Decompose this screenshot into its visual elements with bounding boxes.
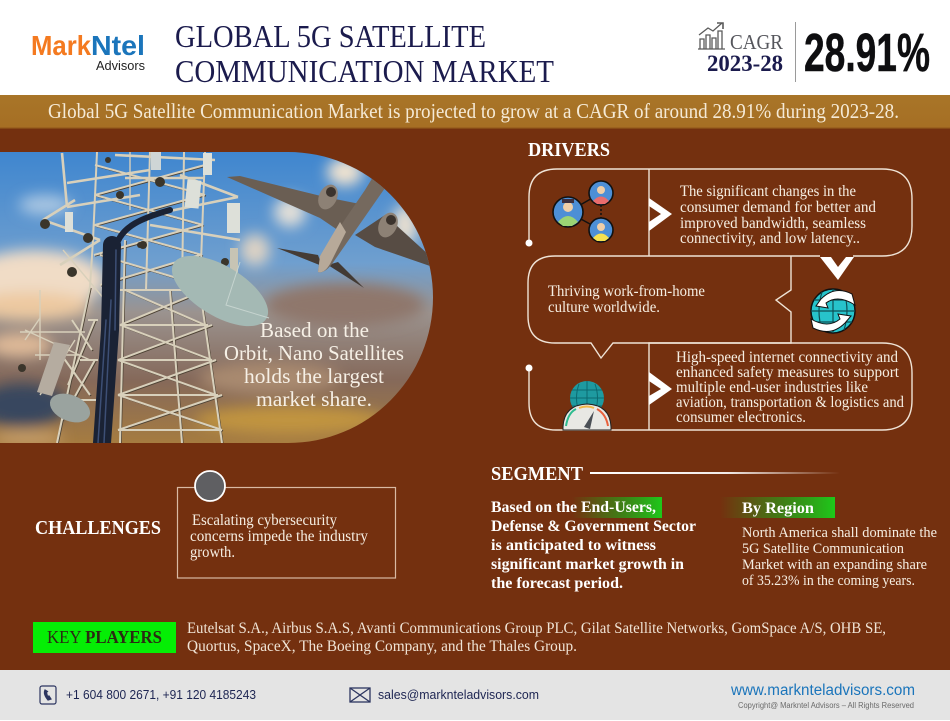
end-users highlight: [572, 497, 662, 518]
key players list: Eutelsat S.A., Airbus S.A.S, Avanti Communications Group PLC, Gilat Satellite Networks, GomSpace A/S, OHB SE,: [187, 620, 886, 637]
title: [175, 18, 554, 89]
driver 3 text: multiple end-user industries like: [676, 379, 868, 396]
driver 1 text: The significant changes in the: [680, 183, 856, 200]
by region text: [742, 525, 937, 589]
driver 3 text: [676, 349, 904, 426]
antenna panels: [37, 152, 240, 396]
copyright: Copyright@ Markntel Advisors – All Rights Reserved: [738, 701, 914, 710]
logo: [31, 30, 145, 73]
driver 3 text: High-speed internet connectivity and: [676, 349, 898, 366]
challenge box: [178, 488, 396, 578]
by region text: Market with an expanding share: [742, 557, 927, 573]
driver 2 text: culture worldwide.: [548, 299, 660, 316]
driver 3 text: enhanced safety measures to support: [676, 364, 900, 381]
driver 3 text: aviation, transportation & logistics and: [676, 394, 904, 411]
icon: people network: [553, 181, 613, 242]
heading: challenges: CHALLENGES: [35, 517, 161, 539]
driver 3 text: consumer electronics.: [676, 409, 806, 426]
by region heading: By Region: [742, 500, 814, 517]
driver 1 text: connectivity, and low latency..: [680, 230, 860, 247]
title: GLOBAL 5G SATELLITE: [175, 18, 486, 54]
CAGR label: [707, 30, 783, 76]
end-users text: significant market growth in: [491, 556, 684, 573]
key players list: Quortus, SpaceX, The Boeing Company, and the Thales Group.: [187, 638, 577, 655]
marker dots: [526, 240, 532, 372]
driver 2 text: Thriving work-from-home: [548, 283, 705, 300]
driver 1 text: consumer demand for better and: [680, 199, 876, 216]
panel: drivers flow: [526, 169, 912, 430]
by region text: North America shall dominate the: [742, 525, 937, 541]
icon: growth bar chart: [698, 23, 725, 49]
segment rule: [590, 472, 840, 474]
logo: Advisors: [96, 58, 145, 73]
photo caption: Based on the: [260, 318, 369, 342]
photo caption: holds the largest: [244, 364, 384, 388]
photo caption: Orbit, Nano Satellites: [224, 341, 404, 365]
icon: phone: [40, 686, 56, 704]
challenge text: concerns impede the industry: [190, 528, 368, 545]
photo panel: telecom tower and airplane: [0, 152, 440, 446]
CAGR label: CAGR: [730, 30, 783, 54]
airplane: [227, 176, 430, 288]
heading: segment: SEGMENT: [491, 463, 584, 485]
end-users text: Based on the End-Users,: [491, 499, 656, 516]
driver 2 text: [548, 283, 705, 316]
by region text: of 35.23% in the coming years.: [742, 573, 915, 589]
icon: globe with arrows: [811, 289, 855, 333]
header band: [0, 0, 950, 95]
challenge text: Escalating cybersecurity: [192, 512, 337, 529]
panel: key players: [33, 620, 886, 655]
challenge text: growth.: [190, 544, 235, 561]
panel: segment: [491, 463, 937, 592]
icon: envelope: [350, 688, 370, 702]
chevrons: [649, 198, 854, 405]
flow outlines: [528, 169, 912, 430]
satellite dish small: [50, 394, 90, 422]
heading: drivers: DRIVERS: [528, 139, 610, 161]
key players badge: KEY PLAYERS: [47, 627, 162, 647]
end-users text: [491, 499, 696, 592]
clouds: [0, 158, 425, 446]
driver 1 text: improved bandwidth, seamless: [680, 215, 866, 232]
footer: [0, 670, 950, 721]
key players list: [187, 620, 886, 655]
CAGR label: 2023-28: [707, 51, 783, 76]
logo: Ntel: [91, 30, 145, 61]
challenge marker: [195, 471, 225, 501]
key players badge: [33, 622, 176, 653]
by region text: 5G Satellite Communication: [742, 541, 905, 557]
icon: globe with speedometer: [563, 381, 611, 430]
end-users text: the forecast period.: [491, 575, 623, 592]
photo caption: [224, 322, 404, 406]
challenge text: [190, 512, 368, 561]
by region highlight: [720, 497, 835, 518]
contact email: sales@marknteladvisors.com: [378, 688, 539, 702]
logo: Mark: [31, 30, 91, 61]
CAGR divider: [795, 22, 796, 82]
satellite dish large: [172, 256, 270, 326]
tower lattice: [58, 166, 223, 444]
title: COMMUNICATION MARKET: [175, 53, 554, 89]
equipment details: [18, 157, 229, 372]
website: www.marknteladvisors.com: [730, 682, 915, 699]
contact phone numbers: +1 604 800 2671, +91 120 4185243: [66, 688, 256, 702]
summary banner: [0, 95, 950, 129]
end-users text: Defense & Government Sector: [491, 518, 696, 535]
driver 1 text: [680, 183, 876, 247]
panel: challenges: [35, 471, 396, 578]
cable bundle: [98, 210, 170, 443]
end-users text: is anticipated to witness: [491, 537, 656, 554]
photo caption: market share.: [256, 387, 372, 411]
